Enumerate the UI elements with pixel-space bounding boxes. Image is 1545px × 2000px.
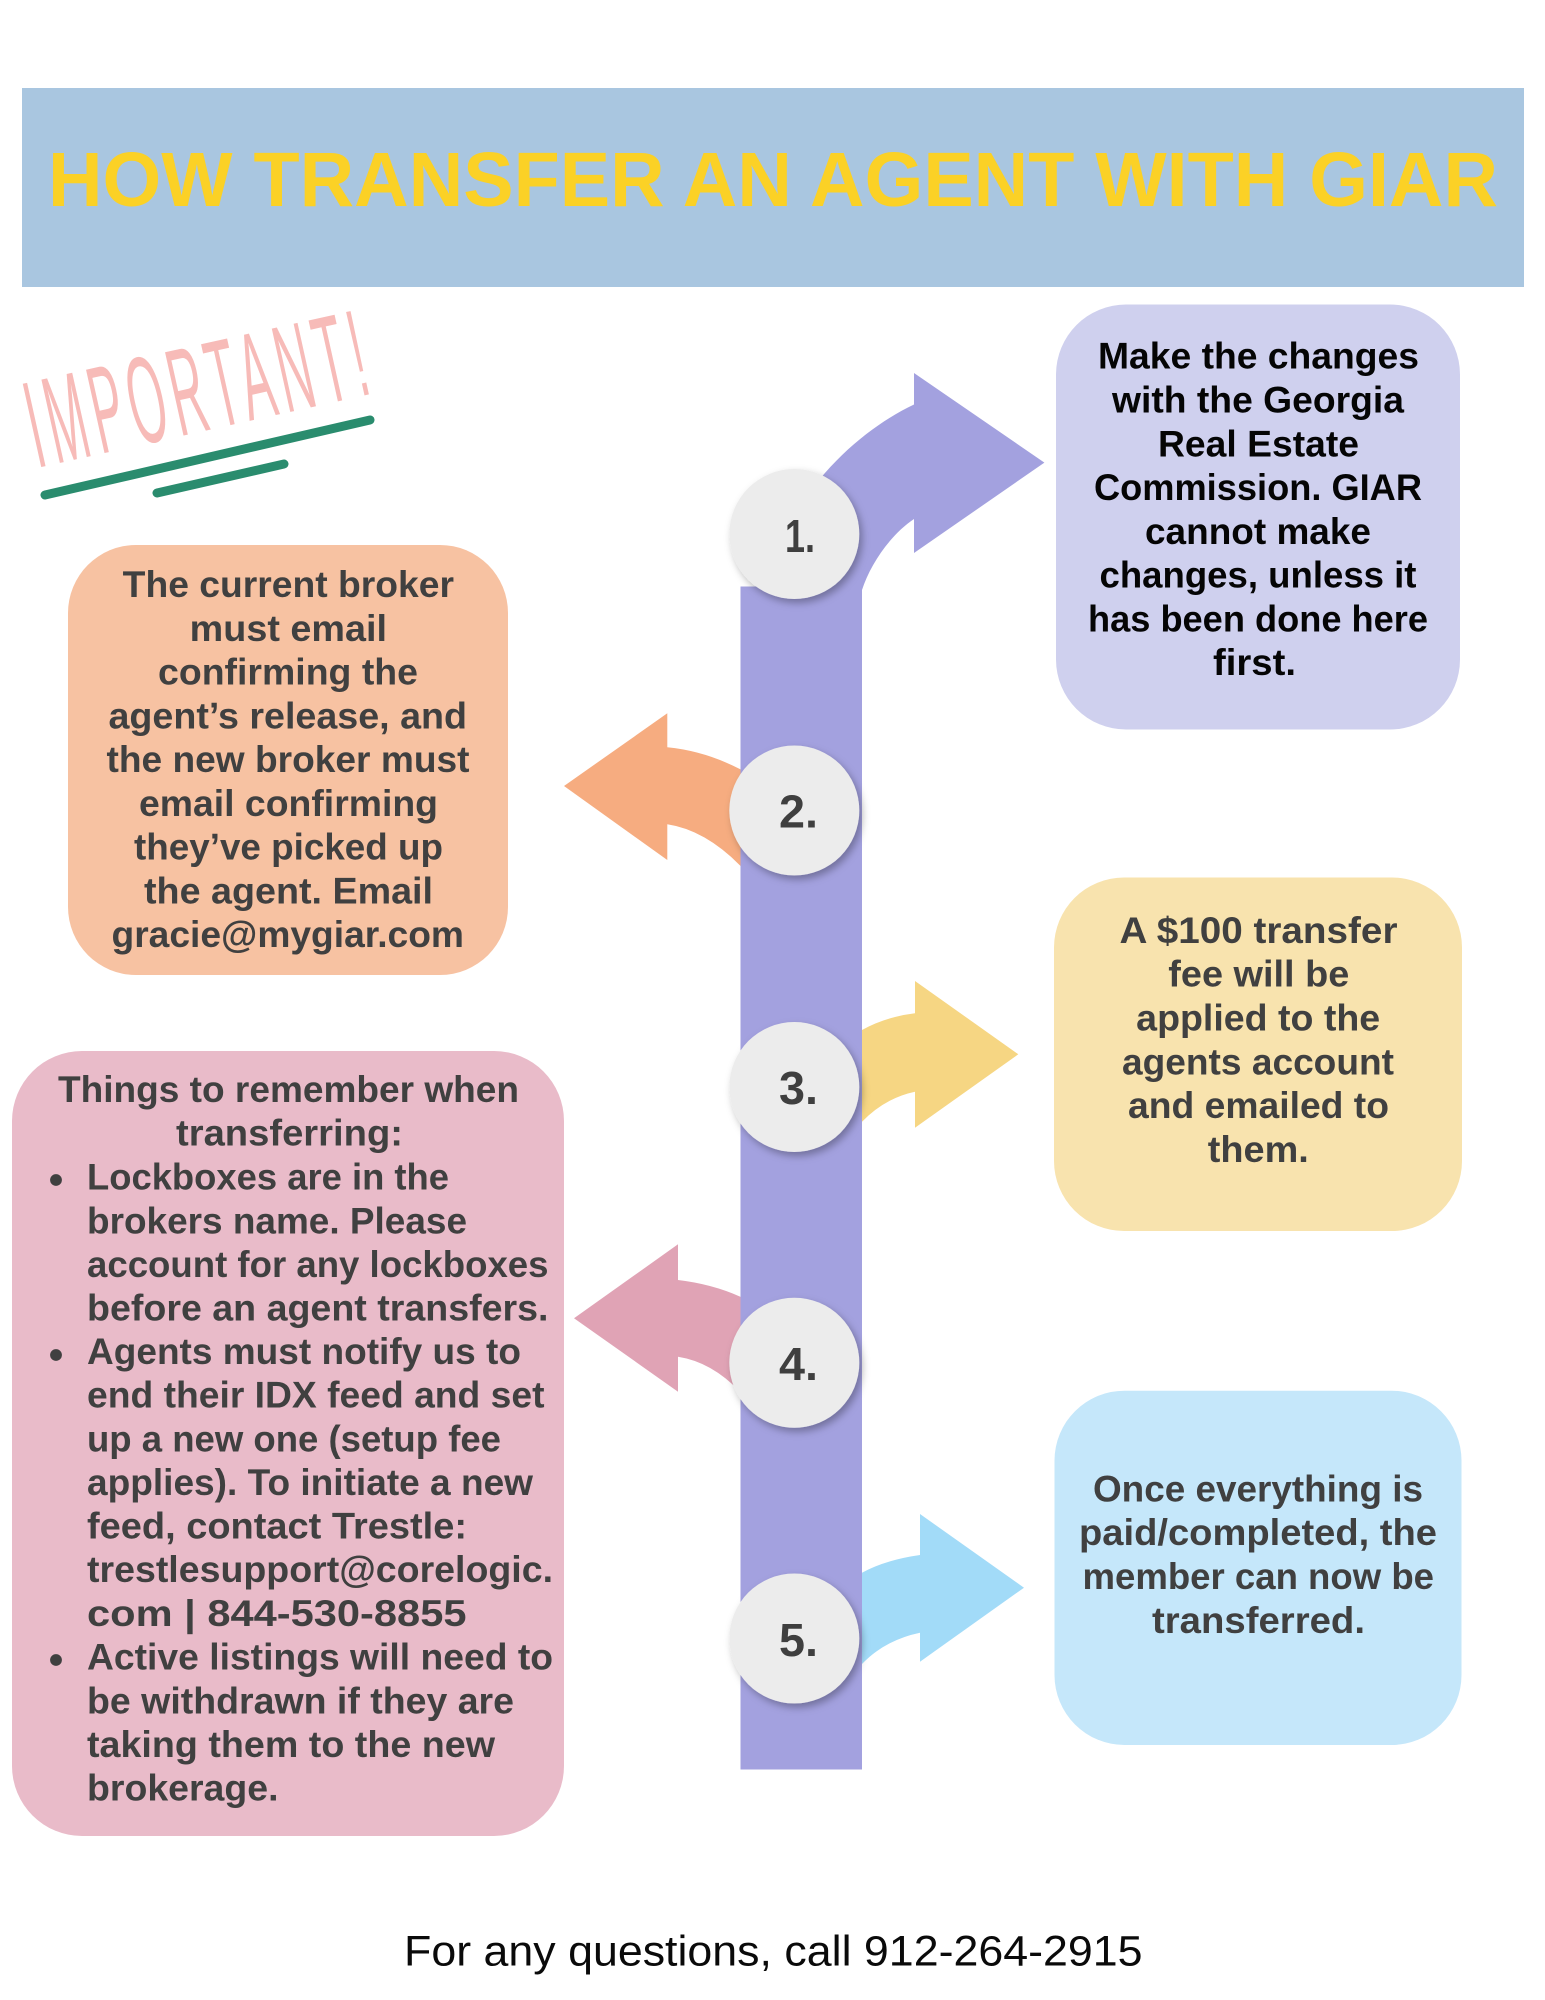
step 1 marker [729, 469, 859, 599]
panel: things to remember: end their IDX feed and set [87, 1375, 544, 1416]
panel: things to remember: applies). To initiate a new [87, 1462, 533, 1503]
panel: step 5 member transferred: member can now be [1082, 1556, 1434, 1597]
panel: things to remember [12, 1051, 564, 1836]
panel: step 2 broker emails: agent’s release, and [108, 695, 467, 736]
panel: step 1 georgia real estate commission: Commission. GIAR [1094, 467, 1422, 508]
step 5 marker [729, 1574, 859, 1704]
bullet 1 [50, 1174, 62, 1186]
panel: step 2 broker emails: they’ve picked up [134, 826, 443, 868]
panel: step 2 broker emails: email confirming [139, 783, 438, 824]
vertical timeline bar [740, 586, 862, 1770]
bullet 3 [50, 1654, 62, 1666]
green underline short [157, 464, 284, 493]
panel: things to remember: feed, contact Trestle: [87, 1506, 467, 1547]
panel: step 1 georgia real estate commission: first. [1213, 642, 1296, 683]
panel: step 3 transfer fee: fee will be [1168, 954, 1349, 995]
panel: things to remember: trestlesupport@corelogic. [87, 1549, 553, 1590]
panel: step 2 broker emails [68, 545, 508, 975]
green underline long [45, 420, 370, 495]
step 4 marker: 4. [779, 1338, 818, 1390]
title: HOW TRANSFER AN AGENT WITH GIAR [48, 137, 1498, 223]
panel: step 2 broker emails: the agent. Email [144, 870, 433, 911]
panel: things to remember: com | 844-530-8855 [87, 1593, 466, 1635]
panel: step 2 broker emails: must email [190, 608, 387, 649]
panel: step 1 georgia real estate commission: Real Estate [1158, 423, 1359, 464]
arrow 4 [574, 1244, 760, 1400]
panel: step 3 transfer fee: them. [1208, 1129, 1309, 1170]
panel: step 5 member transferred: transferred. [1152, 1600, 1365, 1641]
panel: step 2 broker emails: the new broker must [106, 739, 470, 780]
arrow 1 [762, 373, 1044, 590]
panel: things to remember: Active listings will need to [87, 1637, 553, 1678]
panel: step 5 member transferred [1054, 1391, 1462, 1745]
panel: things to remember: transferring: [176, 1113, 403, 1154]
panel: things to remember: Things to remember when [58, 1069, 519, 1110]
panel: step 3 transfer fee [1054, 878, 1462, 1231]
panel: things to remember: account for any lockboxes [87, 1244, 548, 1285]
step 1 marker: 1. [785, 510, 815, 562]
panel: step 5 member transferred: Once everything is [1093, 1468, 1423, 1510]
panel: things to remember: Agents must notify us to [87, 1331, 521, 1372]
step 5 marker: 5. [779, 1614, 818, 1666]
panel: step 1 georgia real estate commission: Make the changes [1098, 336, 1419, 377]
panel: step 3 transfer fee: and emailed to [1128, 1085, 1389, 1126]
panel: things to remember: before an agent transfers. [87, 1288, 548, 1329]
panel: step 1 georgia real estate commission: changes, unless it [1100, 555, 1416, 596]
panel: step 1 georgia real estate commission [1056, 304, 1460, 730]
arrow 3 [840, 981, 1018, 1135]
title banner [22, 88, 1524, 287]
arrow 2 [564, 713, 760, 880]
panel: things to remember: brokers name. Please [87, 1200, 467, 1241]
panel: step 2 broker emails: gracie@mygiar.com [112, 914, 464, 955]
panel: step 5 member transferred: paid/completed, the [1079, 1512, 1437, 1553]
step 4 marker [729, 1298, 859, 1428]
panel: things to remember: up a new one (setup fee [87, 1418, 501, 1459]
step 3 marker: 3. [779, 1062, 818, 1114]
panel: step 1 georgia real estate commission: with the Georgia [1111, 380, 1404, 420]
panel: step 3 transfer fee: A $100 transfer [1120, 910, 1398, 951]
panel: things to remember: brokerage. [87, 1768, 278, 1809]
footer contact line: For any questions, call 912-264-2915 [404, 1928, 1142, 1976]
panel: step 2 broker emails: confirming the [158, 652, 418, 692]
panel: things to remember: Lockboxes are in the [87, 1157, 449, 1198]
important callout [13, 282, 385, 495]
important text: IMPORTANT! [13, 282, 385, 494]
panel: step 1 georgia real estate commission: cannot make [1145, 511, 1371, 552]
panel: step 2 broker emails: The current broker [123, 564, 454, 605]
step 2 marker [729, 746, 859, 876]
step 3 marker [729, 1022, 859, 1152]
panel: things to remember: be withdrawn if they are [87, 1680, 514, 1721]
panel: step 3 transfer fee: applied to the [1136, 998, 1380, 1038]
panel: step 3 transfer fee: agents account [1122, 1041, 1394, 1082]
step 2 marker: 2. [779, 786, 818, 838]
arrow 5 [840, 1514, 1024, 1680]
panel: things to remember: taking them to the new [87, 1724, 495, 1765]
panel: step 1 georgia real estate commission: has been done here [1088, 598, 1428, 640]
bullet 2 [50, 1349, 62, 1361]
